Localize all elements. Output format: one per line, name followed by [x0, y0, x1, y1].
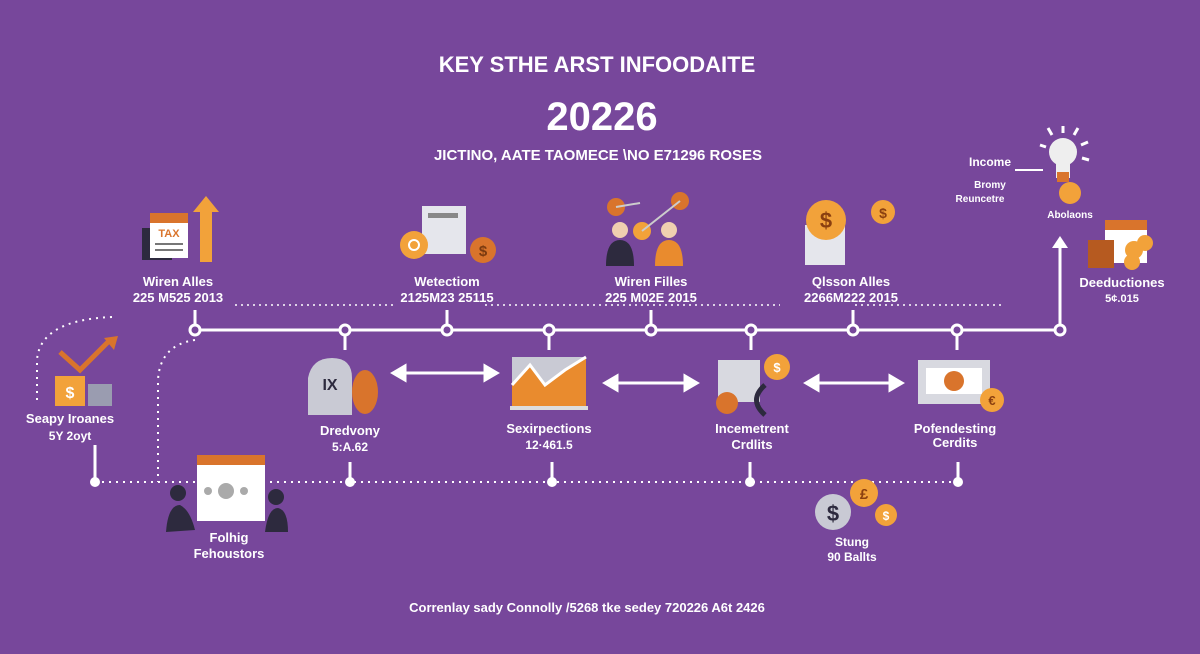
item: Folhig Fehoustors — [166, 455, 288, 561]
item: Wetectiom: Wetectiom — [414, 274, 480, 289]
item: Pofendesting Cerdits: € — [988, 393, 996, 408]
item: Pofendesting Cerdits: Pofendesting — [914, 421, 996, 436]
item: Seapy Iroanes: Seapy Iroanes — [26, 411, 114, 426]
item: Incemetrent Crdlits: Incemetrent — [715, 421, 790, 436]
item: Seapy Iroanes: 5Y 2oyt — [49, 429, 91, 443]
item: Pofendesting Cerdits — [914, 360, 1004, 450]
item: Dredvony: IX — [322, 377, 338, 394]
item: Wetectiom: $ — [479, 243, 488, 260]
item: Incemetrent Crdlits: Crdlits — [731, 437, 773, 452]
footer: Correnlay sady Connolly /5268 tke sedey 720226 A6t 2426 — [409, 600, 765, 615]
item: Incemetrent Crdlits: $ — [773, 360, 781, 375]
item: Stung 90 Ballts: Stung — [835, 535, 869, 549]
item: Deeductiones: 5¢.015 — [1105, 293, 1139, 305]
item: Income light bulb: Abolaons — [1047, 210, 1093, 221]
item: Qlsson Alles — [804, 200, 898, 305]
item: Income light bulb: Reuncetre — [956, 194, 1005, 205]
arrows between lower items — [393, 366, 902, 390]
item: Dredvony: Dredvony — [320, 423, 381, 438]
item: Wiren Alles (tax icon): Wiren Alles — [143, 274, 213, 289]
item: Wiren Filles — [605, 192, 697, 305]
item: Incemetrent Crdlits — [715, 354, 790, 452]
item: Wiren Filles: 225 M02E 2015 — [605, 290, 697, 305]
item: Qlsson Alles: 2266M222 2015 — [804, 290, 898, 305]
item: Income light bulb: Bromy — [974, 180, 1006, 191]
item: Wiren Alles (tax icon) — [133, 196, 223, 305]
item: Wetectiom: 2125M23 25115 — [400, 290, 494, 305]
item: Stung 90 Ballts: $ — [883, 509, 890, 523]
item: Folhig Fehoustors: Fehoustors — [194, 546, 264, 561]
item: Deeductiones — [1079, 220, 1165, 305]
item: Deeductiones: Deeductiones — [1079, 275, 1165, 290]
item: Seapy Iroanes — [26, 336, 118, 443]
item: Seapy Iroanes: $ — [66, 385, 75, 402]
item: Sexirpections: 12·461.5 — [525, 438, 573, 452]
item: Sexirpections: Sexirpections — [506, 421, 592, 436]
year heading: 20226 — [546, 95, 658, 139]
item: Dredvony — [308, 358, 381, 454]
item: Dredvony: 5:A.62 — [332, 440, 368, 454]
item: Wiren Alles (tax icon): TAX — [158, 228, 180, 240]
item: Wetectiom — [400, 206, 496, 305]
item: Wiren Filles: Wiren Filles — [615, 274, 687, 289]
item: Stung 90 Ballts: 90 Ballts — [827, 550, 877, 564]
item: Sexirpections — [506, 357, 592, 452]
item: Pofendesting Cerdits: Cerdits — [933, 435, 977, 450]
item: Wiren Alles (tax icon): 225 M525 2013 — [133, 290, 223, 305]
item: Income light bulb: Income — [969, 155, 1011, 169]
item: Qlsson Alles: $ — [879, 205, 887, 221]
item: Folhig Fehoustors: Folhig — [210, 530, 249, 545]
item: Stung 90 Ballts: $ — [827, 501, 839, 526]
timeline lines — [37, 236, 1068, 487]
item: Qlsson Alles: $ — [820, 208, 832, 233]
item: Stung 90 Ballts: £ — [860, 486, 869, 503]
item: Income light bulb — [956, 126, 1093, 221]
title: KEY STHE ARST INFOODAITE — [439, 52, 755, 77]
subtitle: JICTINO, AATE TAOMECE \NO E71296 ROSES — [434, 147, 762, 164]
item: Qlsson Alles: Qlsson Alles — [812, 274, 890, 289]
item: Stung 90 Ballts — [815, 479, 897, 564]
